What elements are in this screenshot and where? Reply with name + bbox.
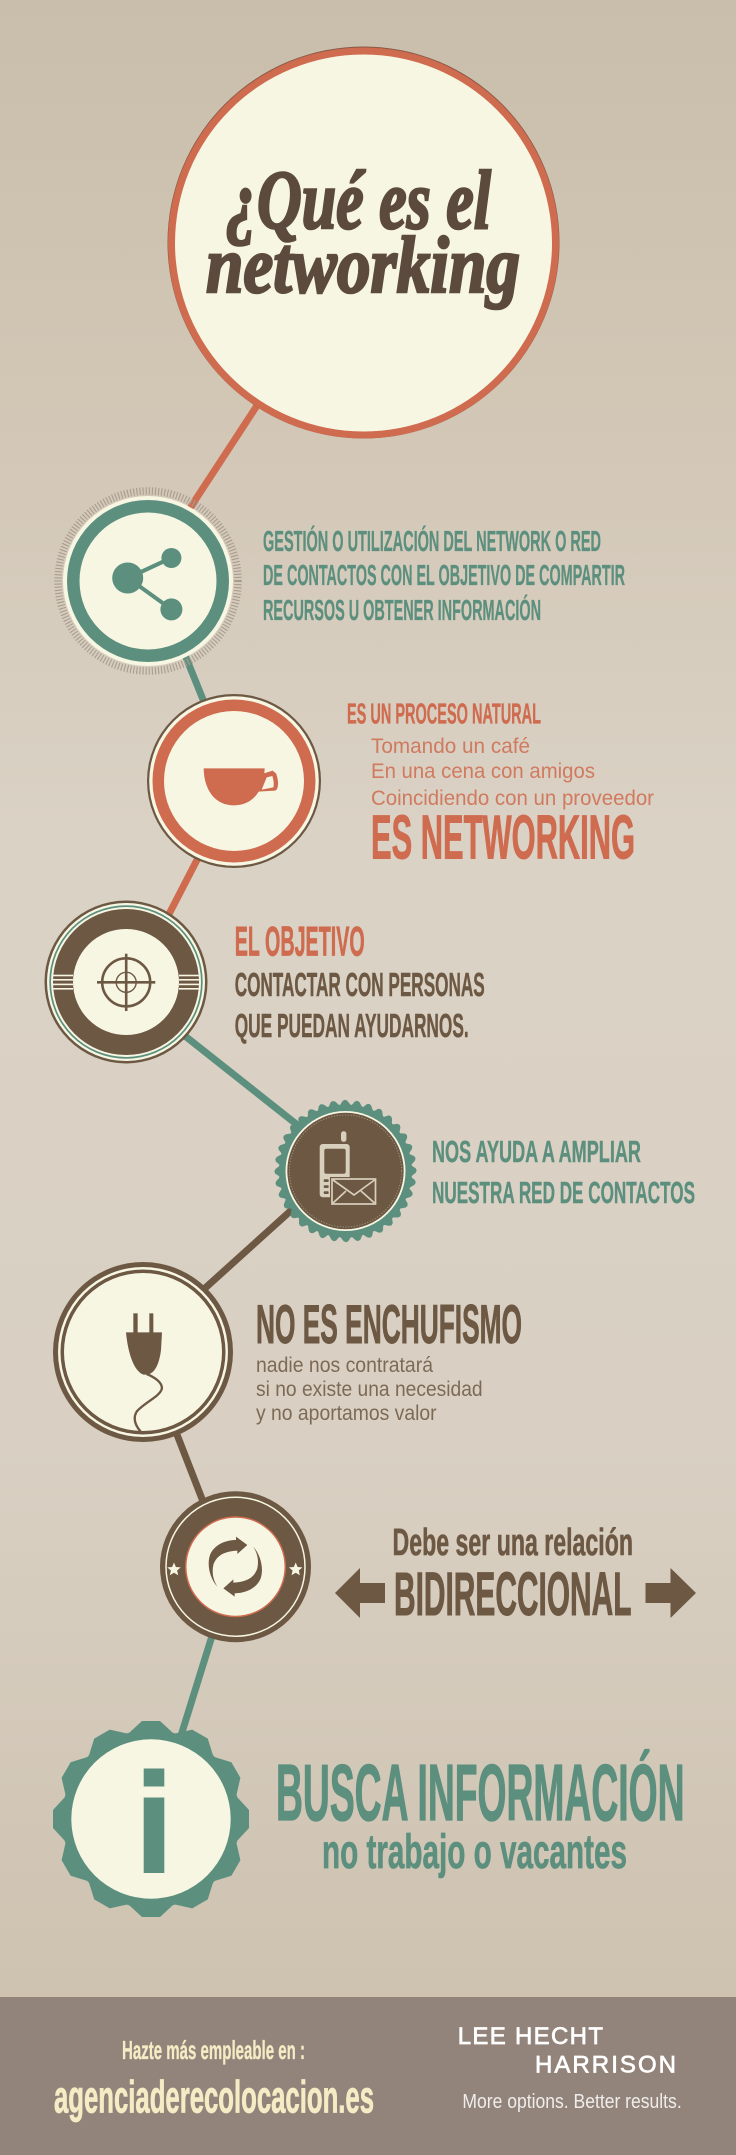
footer band	[0, 1997, 736, 2155]
step 6: refresh badge	[160, 1491, 311, 1642]
step 2 text: Tomando un café	[371, 735, 530, 758]
connector lines	[167, 404, 300, 1742]
step 3 text: CONTACTAR CON PERSONAS	[235, 966, 485, 1003]
footer call to action: Hazte más empleable en :	[122, 2035, 305, 2065]
icon: target	[97, 954, 155, 1011]
icon: envelope	[332, 1178, 376, 1204]
step 5 text	[256, 1293, 522, 1425]
step 3: target badge	[44, 900, 208, 1064]
title text: networking	[206, 222, 520, 310]
step 2 text: ES UN PROCESO NATURAL	[347, 698, 541, 730]
step 5: plug badge	[53, 1262, 233, 1442]
step 3 text	[235, 918, 485, 1044]
step 7 text	[276, 1748, 684, 1879]
arrow: left	[335, 1568, 385, 1618]
icon: coffee cup	[204, 768, 278, 805]
step 2 text: Coincidiendo con un proveedor	[371, 787, 654, 810]
arrow: right	[646, 1568, 696, 1618]
step 2 text	[347, 698, 654, 872]
footer call to action: agenciaderecolocacion.es	[54, 2072, 374, 2123]
footer logo: More options. Better results.	[462, 2091, 682, 2113]
step 2: coffee cup badge	[147, 694, 321, 868]
step 1: share icon badge	[58, 491, 238, 671]
icon: letter i	[144, 1768, 164, 1873]
icon: phone	[320, 1131, 350, 1197]
step 5 text: si no existe una necesidad	[256, 1378, 483, 1401]
icon: plug	[126, 1313, 162, 1432]
footer logo	[458, 2023, 682, 2113]
band stripes	[53, 975, 199, 990]
step 2 text: En una cena con amigos	[371, 760, 595, 783]
footer logo: LEE HECHT	[458, 2023, 603, 2050]
footer logo: HARRISON	[535, 2051, 676, 2078]
footer call to action	[54, 2035, 374, 2123]
step 4 text	[432, 1134, 695, 1210]
icon: stars	[167, 1562, 302, 1575]
step 3 text: QUE PUEDAN AYUDARNOS.	[235, 1007, 469, 1044]
title text: ¿Qué es el	[226, 154, 491, 247]
title circle	[168, 46, 560, 438]
step 7: info badge	[53, 1721, 249, 1917]
step 3 text: EL OBJETIVO	[235, 918, 365, 964]
step 5 text: nadie nos contratará	[256, 1354, 433, 1377]
step 1 text	[263, 524, 625, 627]
step 6 text	[392, 1522, 633, 1628]
step 4: phone and mail badge	[255, 1085, 436, 1257]
step 5 text: y no aportamos valor	[256, 1402, 437, 1425]
title text	[206, 154, 520, 310]
icon: refresh arrows	[209, 1537, 262, 1597]
icon: share	[112, 548, 182, 620]
